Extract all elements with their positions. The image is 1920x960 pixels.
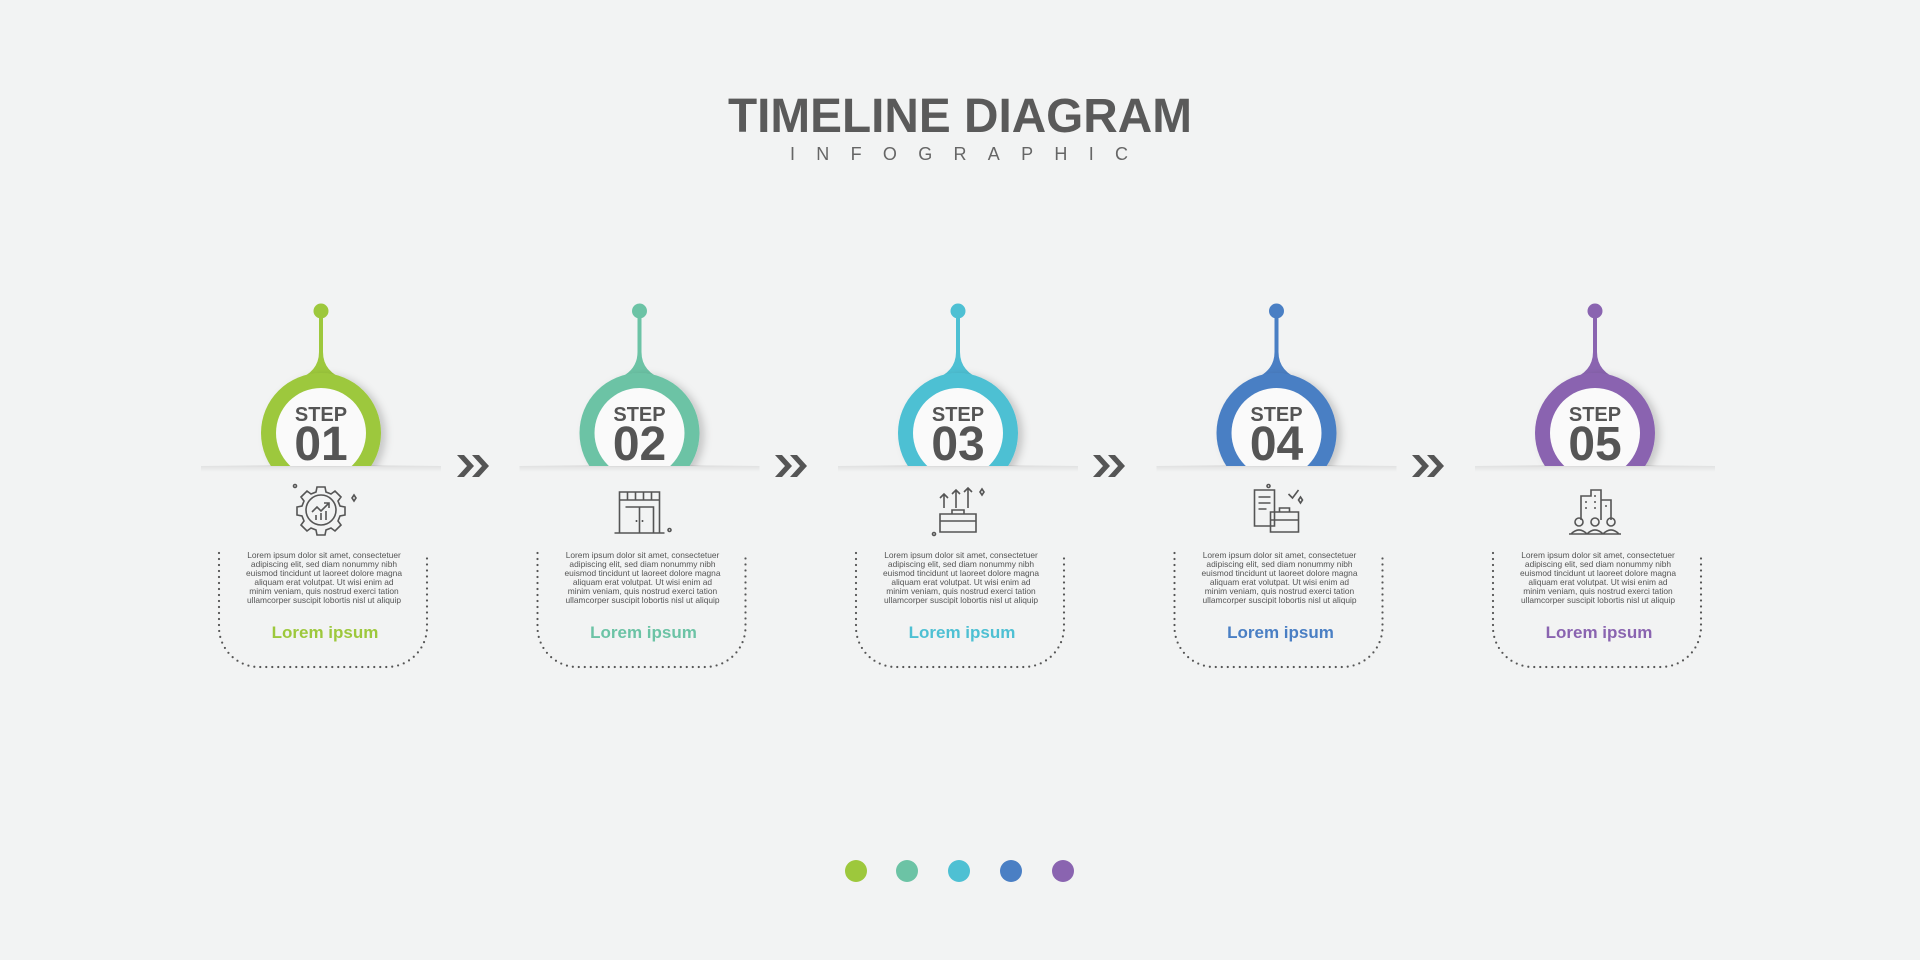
icon: shop [614, 492, 671, 533]
divider line [1156, 465, 1396, 472]
description: aliquam erat volutpat. Ut wisi enim ad [254, 577, 394, 587]
step badge: 01 [294, 418, 348, 471]
label: Lorem ipsum [909, 623, 1015, 642]
step badge: 03 [931, 418, 985, 471]
step badge: STEP [295, 404, 347, 426]
color dots legend [845, 860, 1074, 882]
description: Lorem ipsum dolor sit amet, consectetuer [247, 550, 401, 560]
label: Lorem ipsum [590, 623, 697, 642]
step badge: STEP [613, 404, 666, 426]
description: minim veniam, quis nostrud exerci tation [1523, 586, 1673, 596]
step badge: 04 [1250, 418, 1304, 471]
divider line [520, 465, 760, 472]
description: Lorem ipsum dolor sit amet, consectetuer [884, 550, 1038, 560]
arrow 3 [1093, 455, 1125, 477]
description: aliquam erat volutpat. Ut wisi enim ad [891, 577, 1031, 587]
step badge: 02 [613, 418, 666, 471]
description: minim veniam, quis nostrud exerci tation [886, 586, 1036, 596]
description [1202, 550, 1358, 605]
label: Lorem ipsum [1227, 623, 1334, 642]
icon: documents briefcase [1254, 484, 1302, 532]
description [246, 550, 402, 605]
description: Lorem ipsum dolor sit amet, consectetuer [1521, 550, 1675, 560]
step 5 [1475, 304, 1715, 667]
description: ullamcorper suscipit lobortis nisl ut aliquip [884, 595, 1038, 605]
divider line [1475, 465, 1715, 472]
step badge [580, 304, 700, 493]
description: minim veniam, quis nostrud exerci tation [1205, 586, 1355, 596]
dotted frame [1174, 553, 1382, 667]
description [1520, 550, 1676, 605]
dotted frame [856, 553, 1064, 667]
label: Lorem ipsum [272, 623, 378, 642]
description: ullamcorper suscipit lobortis nisl ut aliquip [1202, 595, 1357, 605]
arrow 4 [1412, 455, 1444, 477]
description: aliquam erat volutpat. Ut wisi enim ad [573, 577, 712, 587]
step badge [261, 304, 381, 493]
description: euismod tincidunt ut laoreet dolore magna [246, 568, 402, 578]
description: aliquam erat volutpat. Ut wisi enim ad [1528, 577, 1668, 587]
description [883, 550, 1039, 605]
dotted frame [219, 553, 427, 667]
description: euismod tincidunt ut laoreet dolore magna [883, 568, 1039, 578]
description: Lorem ipsum dolor sit amet, consectetuer [1203, 550, 1357, 560]
description: adipiscing elit, sed diam nonummy nibh [1206, 559, 1353, 569]
step 2 [520, 304, 760, 667]
label: Lorem ipsum [1546, 623, 1652, 642]
dotted frame [1493, 553, 1701, 667]
step 3 [838, 304, 1078, 667]
icon: buildings team [1569, 490, 1621, 534]
dotted frame [538, 553, 746, 667]
icon: gear chart [294, 484, 356, 535]
step badge: STEP [1250, 404, 1303, 426]
description: adipiscing elit, sed diam nonummy nibh [1525, 559, 1671, 569]
arrow 2 [775, 455, 807, 477]
arrow 1 [457, 455, 489, 477]
step badge [1535, 304, 1655, 493]
divider line [838, 465, 1078, 472]
description: ullamcorper suscipit lobortis nisl ut aliquip [1521, 595, 1675, 605]
subtitle: INFOGRAPHIC [790, 144, 1128, 164]
icon: briefcase growth [932, 488, 984, 536]
step badge [1216, 304, 1336, 493]
description: euismod tincidunt ut laoreet dolore magna [565, 568, 721, 578]
description: Lorem ipsum dolor sit amet, consectetuer [566, 550, 720, 560]
step badge: STEP [932, 404, 984, 426]
step badge: 05 [1568, 418, 1622, 471]
description [565, 550, 721, 605]
step 1 [201, 304, 441, 667]
step 4 [1156, 304, 1396, 667]
description: euismod tincidunt ut laoreet dolore magna [1520, 568, 1676, 578]
description: aliquam erat volutpat. Ut wisi enim ad [1210, 577, 1349, 587]
description: adipiscing elit, sed diam nonummy nibh [888, 559, 1034, 569]
description: minim veniam, quis nostrud exerci tation [568, 586, 718, 596]
description: adipiscing elit, sed diam nonummy nibh [251, 559, 397, 569]
description: minim veniam, quis nostrud exerci tation [249, 586, 399, 596]
description: ullamcorper suscipit lobortis nisl ut aliquip [565, 595, 720, 605]
title: TIMELINE DIAGRAM [728, 90, 1192, 143]
divider line [201, 465, 441, 472]
description: ullamcorper suscipit lobortis nisl ut aliquip [247, 595, 401, 605]
description: adipiscing elit, sed diam nonummy nibh [569, 559, 716, 569]
description: euismod tincidunt ut laoreet dolore magna [1202, 568, 1358, 578]
step badge [898, 304, 1018, 493]
step badge: STEP [1569, 404, 1621, 426]
